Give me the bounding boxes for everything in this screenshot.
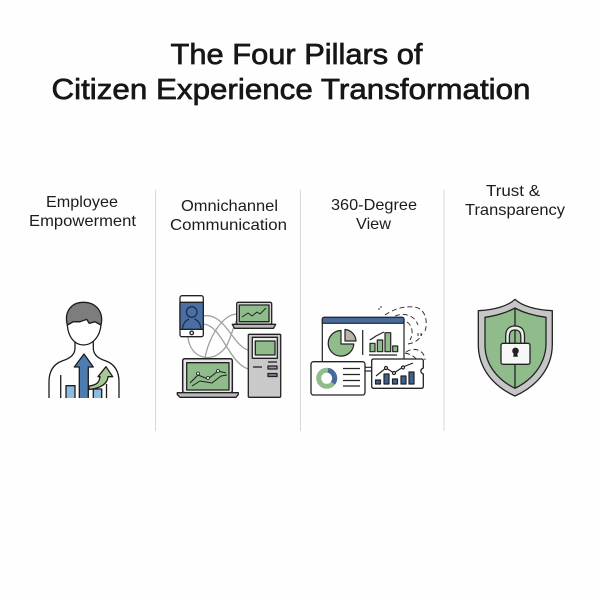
donut card bbox=[311, 362, 365, 395]
heading: 360-degree view: View bbox=[356, 216, 391, 233]
bar chart card bbox=[372, 359, 423, 388]
small laptop bbox=[232, 302, 276, 328]
heading: 360-degree view: 360-Degree bbox=[331, 197, 417, 214]
heading: trust and transparency: Trust & bbox=[486, 183, 540, 200]
icon: connected devices bbox=[177, 296, 281, 397]
title: The Four Pillars of bbox=[170, 39, 423, 71]
heading: trust and transparency: Transparency bbox=[465, 202, 565, 219]
panel: 360-degree view bbox=[311, 197, 426, 395]
phone bbox=[180, 296, 203, 337]
connection curves bbox=[188, 314, 248, 369]
browser window bbox=[322, 317, 404, 367]
title: Citizen Experience Transformation bbox=[52, 74, 530, 106]
panel: trust and transparency bbox=[465, 183, 565, 396]
heading: omnichannel communication: Omnichannel bbox=[181, 198, 278, 215]
panel: omnichannel communication bbox=[170, 198, 287, 397]
heading: trust and transparency bbox=[465, 183, 565, 219]
heading: employee empowerment: Employee bbox=[46, 194, 118, 211]
icon: dashboard bbox=[311, 306, 426, 395]
panel: employee empowerment bbox=[29, 194, 137, 398]
icon: person with growth arrows bbox=[49, 302, 119, 398]
kiosk bbox=[248, 334, 281, 397]
dashed arcs bbox=[379, 306, 426, 360]
icon: shield with padlock bbox=[478, 299, 552, 396]
title bbox=[52, 39, 530, 106]
heading: omnichannel communication bbox=[170, 198, 287, 234]
heading: 360-degree view bbox=[331, 197, 417, 233]
heading: employee empowerment: Empowerment bbox=[29, 213, 137, 230]
heading: omnichannel communication: Communication bbox=[170, 217, 287, 234]
heading: employee empowerment bbox=[29, 194, 137, 230]
large laptop bbox=[177, 359, 238, 397]
